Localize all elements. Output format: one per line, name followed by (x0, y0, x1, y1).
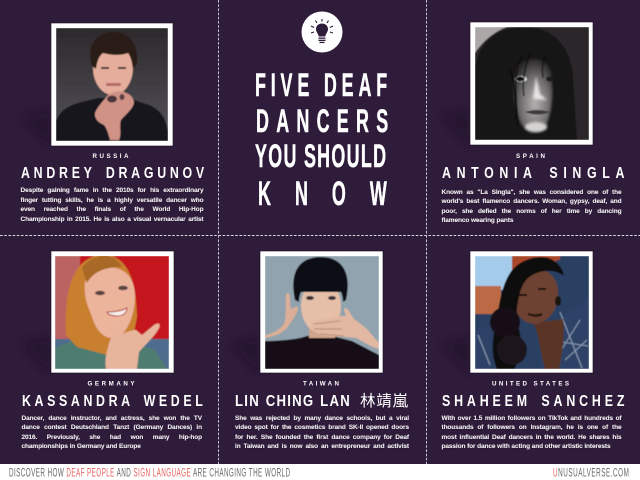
text block: Antonia Singla bio: world's best flamenco dancers. Woman, gypsy, deaf, and (442, 198, 622, 205)
panel: Shaheem Sanchez photo (443, 251, 593, 373)
panel: Lin Ching Lan photo (233, 251, 383, 373)
text block: Shaheem Sanchez bio: passion for dance with acting and other artistic interests (442, 443, 611, 450)
text block: Andrey Dragunov bio: finger tutting skills, he is a highly versatile dancer who (20, 197, 204, 204)
text block: Shaheem Sanchez bio (442, 414, 622, 450)
country labels: TAIWAN (303, 380, 340, 388)
text block: Kassandra Wedel bio (22, 414, 202, 450)
dancer names: ANTONIA SINGLA (442, 164, 624, 181)
country labels: RUSSIA (92, 153, 129, 160)
dancer names: KASSANDRA WEDEL (22, 392, 203, 409)
dancer names: LIN CHING LAN (235, 393, 350, 410)
text block: Andrey Dragunov bio (20, 187, 204, 223)
icon: light bulb (302, 12, 342, 52)
text block: Shaheem Sanchez bio: thousands of followers on Instagram, he is one of the (442, 424, 622, 431)
footer tagline: DISCOVER HOW DEAF PEOPLE AND SIGN LANGUAGE ARE CHANGING THE WORLD (9, 467, 290, 479)
text block: Antonia Singla bio (441, 188, 622, 224)
title (255, 69, 388, 213)
country labels: UNITED STATES (492, 380, 569, 388)
text block: Antonia Singla bio: flamenco wearing pants (442, 217, 513, 224)
dancer names (21, 164, 625, 411)
text block: Lin Ching Lan bio: video spot for the cosmetics brand SK-II opened doors (235, 424, 409, 431)
text block: Lin Ching Lan bio: She was rejected by many dance schools, but a viral (235, 414, 409, 422)
panel: Andrey Dragunov photo (24, 23, 173, 146)
text block: Andrey Dragunov bio: Championship in 2015. He is also a visual vernacular artist (20, 216, 204, 223)
text block: Kassandra Wedel bio: championships in Germany and Europe (22, 443, 141, 450)
text block: Andrey Dragunov bio: Despite gaining fame in the 2010s for his extraordinary (20, 187, 204, 194)
title: YOU SHOULD (255, 140, 386, 174)
dancer names: ANDREY DRAGUNOV (21, 164, 205, 181)
dancer names: SHAHEEM SANCHEZ (442, 392, 625, 409)
text block: Andrey Dragunov bio: even reached the finals of the World Hip-Hop (20, 206, 204, 213)
country labels: GERMANY (88, 380, 135, 388)
text block: Lin Ching Lan bio (235, 414, 410, 450)
footer bar (0, 464, 640, 480)
text block: Antonia Singla bio: Known as "La Singla", she was considered one of the (442, 188, 622, 196)
text block: Kassandra Wedel bio: 2016. Previously, she had won many hip-hop (22, 434, 202, 441)
country labels (88, 153, 569, 388)
text block: Kassandra Wedel bio: dance contest Deutschland Tanzt (Germany Dances) in (22, 424, 202, 431)
footer website: UNUSUALVERSE.COM (553, 467, 629, 479)
title: FIVE DEAF (255, 69, 387, 103)
text block: Kassandra Wedel bio: Dancer, dance instructor, and actress, she won the TV (22, 414, 202, 422)
text block: Shaheem Sanchez bio: most influential Deaf dancers in the world. He shares his (442, 434, 622, 441)
text block: Antonia Singla bio: poor, she defied the norms of her time by dancing (442, 208, 622, 215)
title: KNOW (258, 174, 387, 213)
panel: Antonia Singla photo (443, 22, 593, 145)
panel: Kassandra Wedel photo (24, 251, 174, 373)
title: DANCERS (256, 105, 388, 139)
text block: Shaheem Sanchez bio: With over 1.5 million followers on TikTok and hundreds of (442, 414, 622, 422)
text block: Lin Ching Lan bio: for her. She founded the first dance company for Deaf (235, 434, 409, 441)
country labels: SPAIN (516, 153, 546, 160)
text block: Lin Ching Lan bio: in Taiwan and is now also an entrepreneur and activist (235, 443, 409, 450)
dancer names: 林靖嵐 (360, 389, 408, 411)
